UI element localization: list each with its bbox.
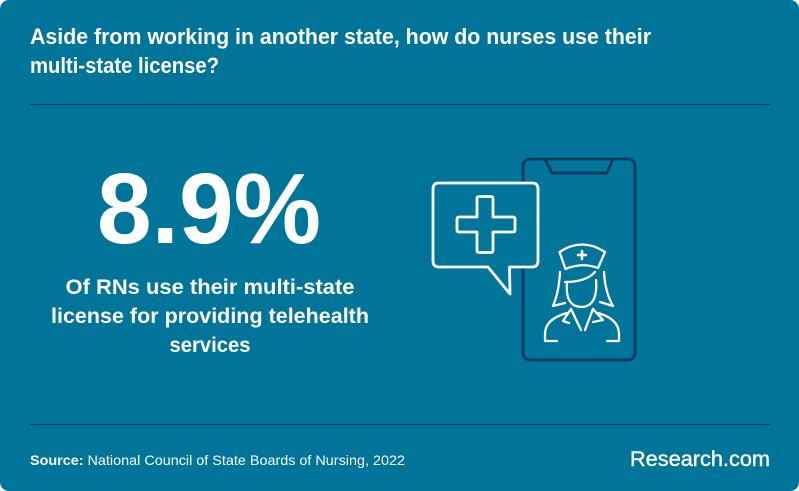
title bbox=[30, 24, 651, 78]
icon: phone bbox=[523, 159, 635, 360]
statistic description: services bbox=[170, 333, 251, 357]
title: multi-state license? bbox=[30, 53, 219, 78]
icon: speech bubble with cross bbox=[433, 183, 538, 294]
statistic description bbox=[51, 275, 369, 357]
icon: phone with nurse and medical speech bubble bbox=[433, 159, 635, 360]
title: Aside from working in another state, how do nurses use their bbox=[30, 24, 651, 49]
icon: nurse bbox=[545, 244, 619, 341]
statistic description: license for providing telehealth bbox=[51, 304, 369, 328]
statistic description: Of RNs use their multi-state bbox=[66, 275, 355, 299]
source: Source: National Council of State Boards of Nursing, 2022 bbox=[30, 452, 405, 468]
logo wordmark: Research.com bbox=[630, 448, 770, 471]
big statistic: 8.9% bbox=[97, 153, 321, 265]
